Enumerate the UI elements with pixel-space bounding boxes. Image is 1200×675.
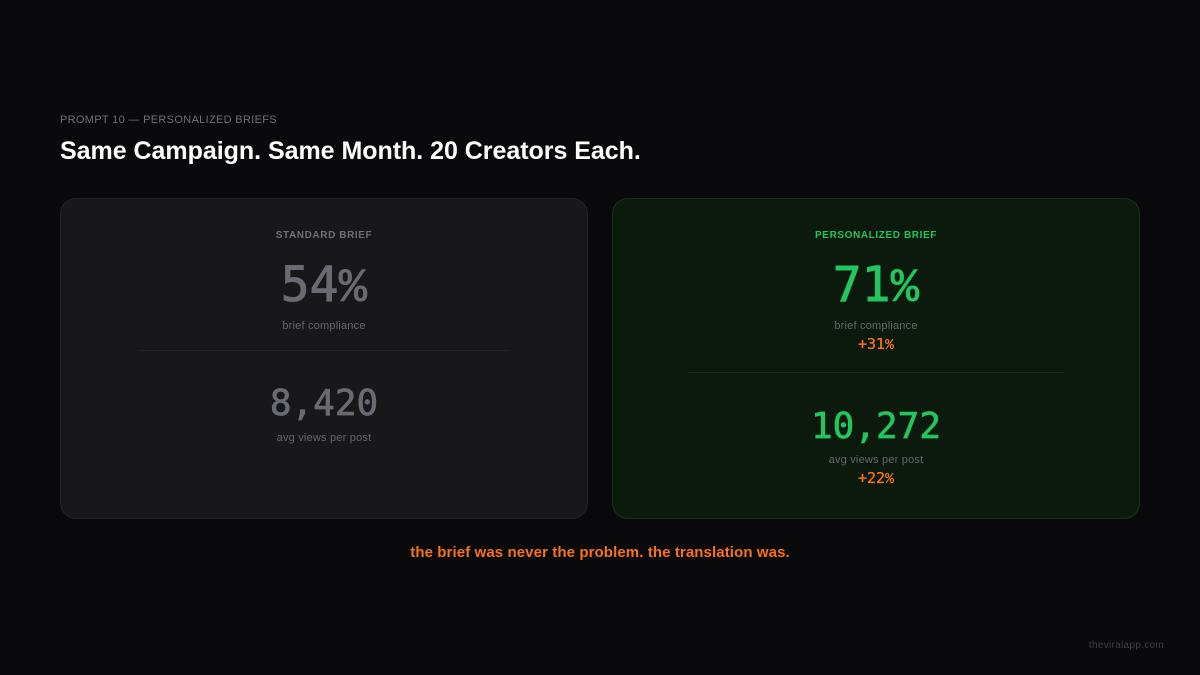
- title: Same Campaign. Same Month. 20 Creators Each.: [60, 137, 641, 165]
- compliance uplift: +31%: [858, 335, 894, 354]
- views uplift: +22%: [858, 469, 894, 488]
- panel: personalized brief: [612, 198, 1140, 519]
- standard compliance caption: brief compliance: [282, 320, 366, 332]
- personalized compliance value: 71%: [833, 257, 919, 316]
- standard views caption: avg views per post: [277, 432, 371, 444]
- eyebrow label: PROMPT 10 — PERSONALIZED BRIEFS: [60, 114, 277, 126]
- closing statement: the brief was never the problem. the translation was.: [410, 544, 790, 561]
- standard brief label: STANDARD BRIEF: [276, 230, 372, 241]
- personalized views value: 10,272: [811, 406, 941, 447]
- standard views value: 8,420: [270, 383, 378, 424]
- personalized views caption: avg views per post: [829, 454, 923, 466]
- standard compliance value: 54%: [281, 257, 367, 316]
- personalized brief label: PERSONALIZED BRIEF: [815, 230, 937, 241]
- panel: standard brief: [60, 198, 588, 519]
- personalized compliance caption: brief compliance: [834, 320, 918, 332]
- footer source: theviralapp.com: [1089, 640, 1164, 651]
